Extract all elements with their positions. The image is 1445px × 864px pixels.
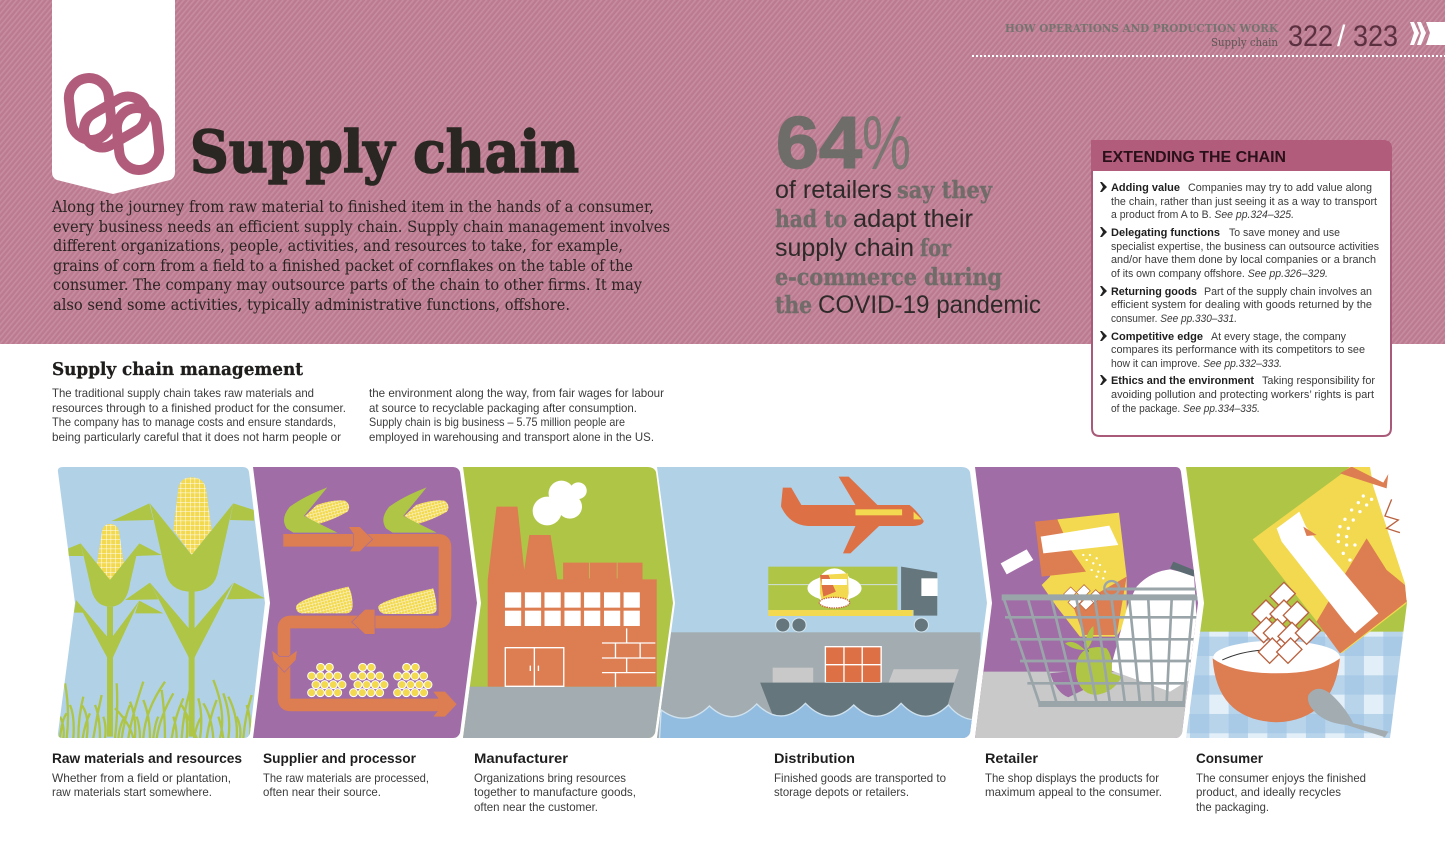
step label: raw materials [52,751,242,799]
panel: raw materials illustration [58,467,265,738]
management text: The traditional supply chain takes raw materials and [52,386,314,400]
step label: manufacturer: often near the customer. [474,800,598,814]
statistic: 64%: say they [897,177,993,204]
list items: avoiding pollution and protecting workers’ rights is part [1111,389,1375,401]
step label: distribution: Finished goods are transported to [774,771,946,785]
step label: distribution: Distribution [774,751,855,766]
running header: 322 [1288,20,1333,53]
list items: consumer. See pp.330–331. [1111,313,1237,325]
list items: of its own company offshore. See pp.326–329. [1111,268,1328,280]
management text: Supply chain is big business – 5.75 million people are [369,415,625,429]
statistic: 64%: supply chain [775,234,914,262]
list items: Competitive edge [1111,331,1203,343]
icon: falling flakes [1252,582,1321,663]
icon: milk bottle [1110,562,1200,692]
list items: specialist expertise, the business can outsource activities [1111,241,1379,253]
icon: corn plants [68,477,265,737]
statistic: 64%: COVID-19 pandemic [818,291,1041,319]
icon: cereal box [1035,513,1127,637]
running header [972,20,1445,56]
intro paragraph [51,197,670,314]
step label: retailer: maximum appeal to the consumer. [985,785,1162,799]
step label: raw materials: Whether from a field or plantation, [52,771,231,785]
step label: manufacturer: Organizations bring resources [474,771,626,785]
statistic: 64% [775,101,1041,319]
icon: cargo ship [760,647,959,719]
list items: Adding value [1111,182,1180,194]
icon: corn grains [308,663,432,697]
step label: retailer: The shop displays the products for [985,771,1159,785]
running header: 323 [1353,20,1398,53]
icon: plane [781,477,924,553]
pink header band [0,0,1445,344]
water [659,703,977,740]
title: Supply chain [190,118,579,186]
list items: the chain, rather than just seeing it as a way to transport [1111,196,1378,208]
statistic: 64%: adapt their [853,205,973,233]
list items: compares its performance with its competitors to see [1111,344,1365,356]
panel: manufacturer illustration [460,460,680,745]
ribbon with chain icon [52,0,175,194]
icon: husked corn [284,487,349,533]
management text: being particularly careful that it does not harm people or [52,430,341,444]
list items: of the package. See pp.334–335. [1111,403,1260,415]
icon: cereal box pouring [1253,467,1407,653]
icon: husked corn [383,487,448,533]
running header: HOW OPERATIONS AND PRODUCTION WORK [1005,21,1279,35]
icon: chain links [67,76,161,172]
panel: extending the chain [1091,140,1392,436]
icon: smoke [533,481,587,525]
step label: consumer [1196,751,1366,814]
step label: consumer: product, and ideally recycles [1196,785,1341,799]
statistic: 64%: % [862,101,911,186]
management text: the environment along the way, from fair wages for labour [369,386,664,400]
step label: manufacturer [474,751,636,814]
intro paragraph: Along the journey from raw material to finished item in the hands of a consumer, [51,197,654,216]
step label: distribution: storage depots or retailers. [774,785,909,799]
grass [60,680,252,738]
running header: Supply chain [1211,35,1279,49]
statistic: 64%: of retailers [775,176,892,204]
intro paragraph: also send some activities, typically administrative functions, offshore. [53,295,570,314]
running header: / [1337,20,1346,53]
panel: supplier and processor illustration [250,460,480,745]
icon: factory [488,507,657,687]
list items: At every stage, the company [1211,331,1346,343]
panel: retailer illustration [975,467,1198,738]
step label: retailer [985,751,1162,799]
icon: shopping basket [1002,581,1198,705]
statistic: 64%: the [775,292,812,319]
step label: raw materials: Raw materials and resources [52,751,242,766]
management text [52,386,664,444]
step label: manufacturer: Manufacturer [474,751,569,766]
statistic: 64%: for [920,235,952,262]
list items [1100,182,1379,415]
step label: consumer: the packaging. [1196,800,1269,814]
management text: The company has to manage costs and ensure standards, [52,415,336,429]
statistic: 64%: had to [775,206,847,233]
intro paragraph: grains of corn from a field to a finished packet of cornflakes on the table of the [53,256,633,275]
management text: resources through to a finished product for the consumer. [52,401,346,415]
arrow: processing route [272,527,457,717]
list items: Ethics and the environment [1111,375,1254,387]
intro paragraph: every business needs an efficient supply chain. Supply chain management involves [53,217,670,236]
list items: efficient system for dealing with goods returned by the [1111,299,1372,311]
list items: Companies may try to add value along [1188,182,1372,194]
step label: raw materials: raw materials start somewhere. [52,785,212,799]
list items: how it can improve. See pp.332–333. [1111,358,1282,370]
list items: and/or have them done by local companies or a branch [1111,254,1376,266]
step label: consumer: The consumer enjoys the finished [1196,771,1366,785]
list items: Delegating functions [1111,227,1220,239]
intro paragraph: consumer. The company may outsource parts of the chain to other firms. It may [53,275,642,294]
panel: consumer illustration [1180,460,1410,740]
subheading: supply chain management: Supply chain management [52,359,304,380]
icon: apple [1065,626,1122,695]
intro paragraph: different organizations, people, activities, and resources to take, for example, [53,236,623,255]
step label: supplier [263,751,429,799]
box heading: EXTENDING THE CHAIN [1102,149,1286,166]
list items: Taking responsibility for [1262,375,1375,387]
panel: distribution illustration [655,460,990,745]
management text: at source to recyclable packaging after consumption. [369,401,637,415]
icon: spoon [1308,689,1388,737]
statistic: 64%: 64 [776,103,862,184]
step label: consumer: Consumer [1196,751,1264,766]
step label: retailer: Retailer [985,751,1039,766]
list items: Part of the supply chain involves an [1204,286,1372,298]
step label: supplier: The raw materials are processed, [263,771,429,785]
step label: supplier: often near their source. [263,785,381,799]
icon: cereal bowl [1213,641,1340,722]
list items: a product from A to B. See pp.324–325. [1111,209,1294,221]
icon: corn cobs [296,587,437,614]
icon: truck [768,567,938,632]
icon: tag [1001,549,1033,574]
statistic: 64%: e-commerce during [775,264,1002,291]
step label: manufacturer: together to manufacture goods, [474,785,636,799]
list items: To save money and use [1229,227,1340,239]
step label: supplier: Supplier and processor [263,751,417,766]
step label: distribution [774,751,946,799]
list items: Returning goods [1111,286,1197,298]
management text: employed in warehousing and transport alone in the US. [369,430,654,444]
